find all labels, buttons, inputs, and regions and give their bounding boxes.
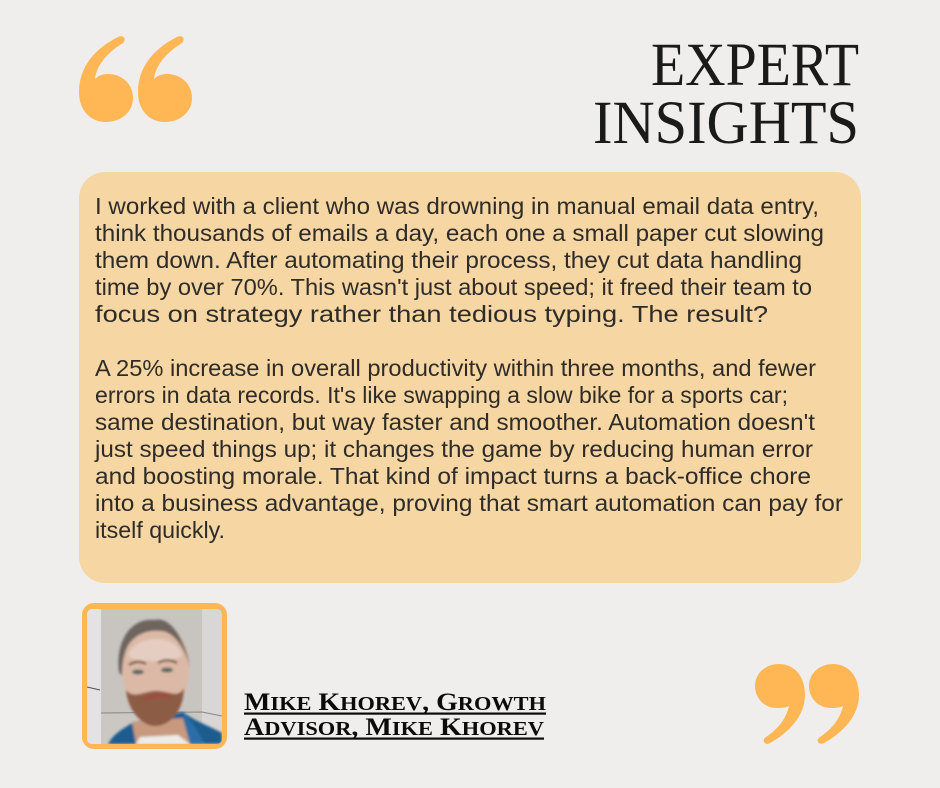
text block: second paragraph: A 25% increase in overall productivity within three months, and fewer: [95, 355, 816, 381]
text block: second paragraph: same destination, but way faster and smoother. Automation doesn't: [95, 409, 816, 435]
panel: quote: [79, 172, 861, 583]
title: INSIGHTS: [593, 90, 859, 157]
icon: opening quotation mark: [79, 36, 192, 122]
attribution name: MIKE KHOREV , GROWTH: [244, 689, 546, 716]
text block: second paragraph: just speed things up; it changes the game by reducing human error: [94, 436, 813, 462]
text block: first paragraph: [95, 193, 824, 327]
title: EXPERT: [651, 32, 859, 99]
attribution name: [244, 689, 546, 741]
text block: second paragraph: errors in data records. It's like swapping a slow bike for a sports car;: [95, 382, 788, 408]
portrait photo: [84, 605, 225, 747]
text block: first paragraph: time by over 70%. This wasn't just about speed; it freed their team to: [95, 274, 812, 300]
attribution name: ADVISOR , MIKE KHOREV: [244, 714, 545, 741]
text block: first paragraph: think thousands of emails a day, each one a small paper cut slowing: [95, 220, 824, 246]
text block: first paragraph: focus on strategy rather than tedious typing. The result?: [95, 301, 768, 327]
title: [593, 32, 859, 157]
text block: second paragraph: and boosting morale. That kind of impact turns a back-office chore: [95, 463, 811, 489]
text block: second paragraph: [94, 355, 843, 543]
text block: second paragraph: itself quickly.: [95, 517, 225, 543]
text block: first paragraph: I worked with a client who was drowning in manual email data entry,: [95, 193, 819, 219]
text block: second paragraph: into a business advantage, proving that smart automation can pay for: [95, 490, 843, 516]
text block: first paragraph: them down. After automating their process, they cut data handling: [95, 247, 802, 273]
icon: closing quotation mark: [755, 664, 859, 744]
